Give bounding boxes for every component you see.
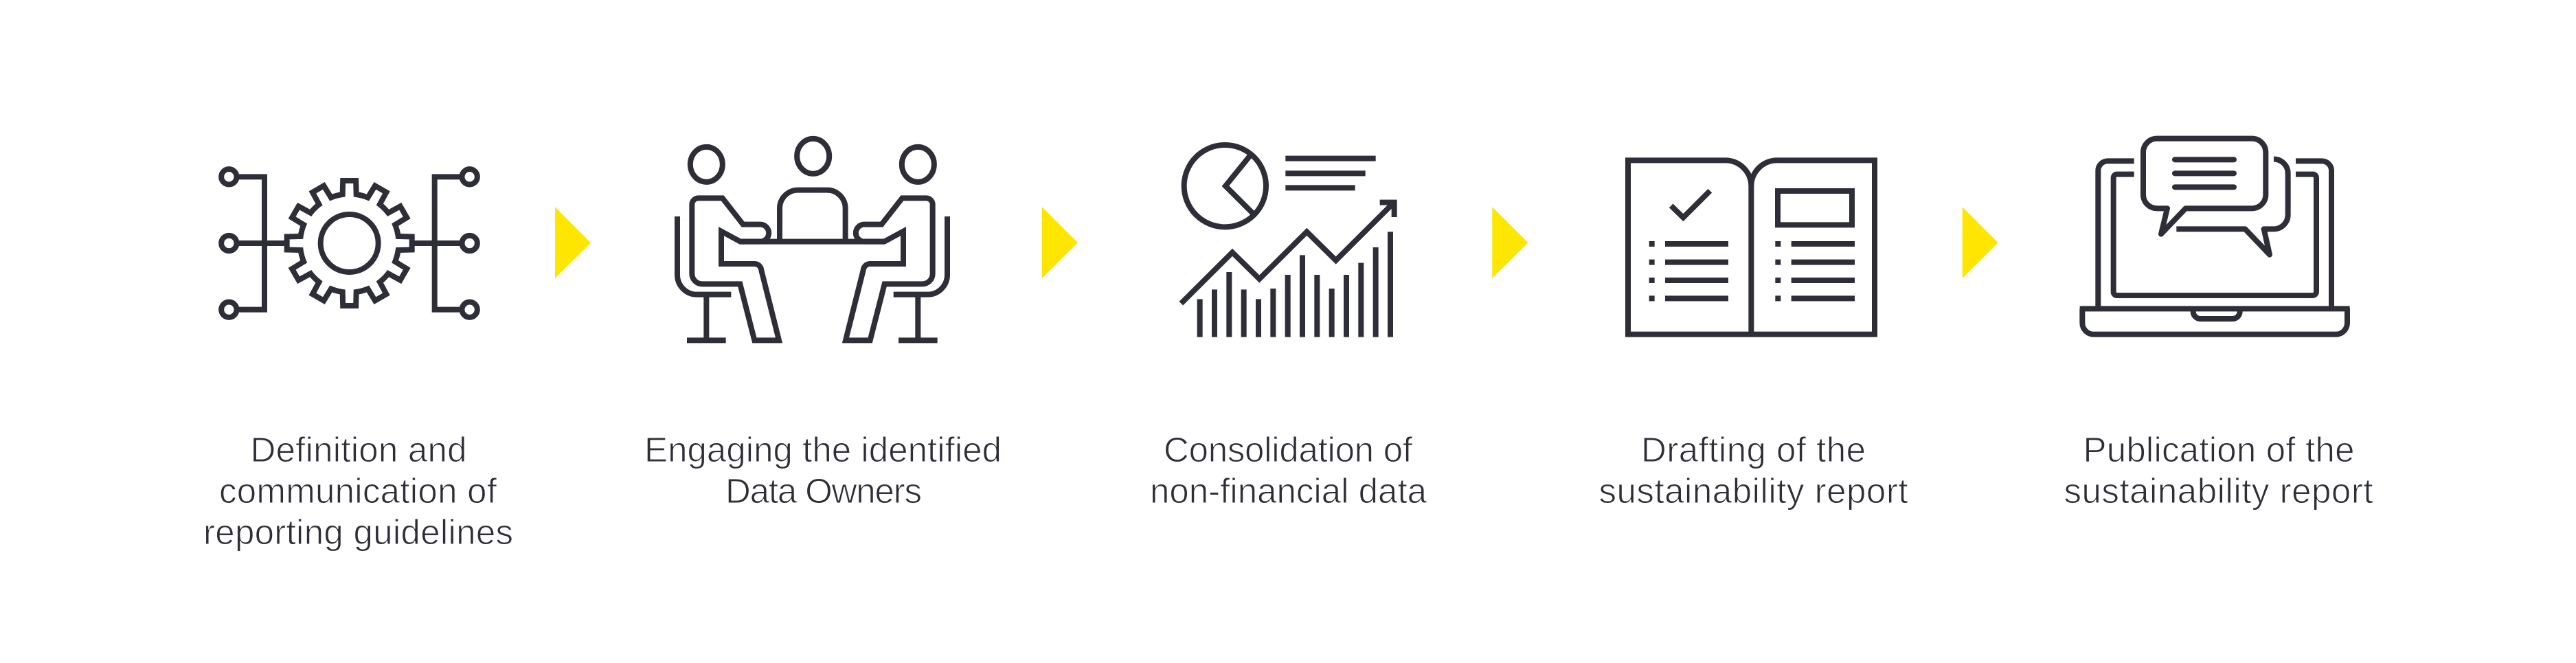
caption 4: Drafting of the bbox=[1641, 430, 1866, 469]
icon: gear with connected nodes bbox=[221, 169, 477, 317]
legend lines bbox=[1285, 159, 1376, 188]
book outline bbox=[1628, 160, 1875, 337]
arrow 2 bbox=[1042, 207, 1078, 278]
right page list bbox=[1775, 244, 1855, 298]
laptop lid bbox=[2098, 161, 2331, 308]
caption 2 bbox=[644, 430, 1002, 510]
table edge bbox=[741, 234, 884, 250]
caption 5 bbox=[2064, 430, 2373, 510]
caption 3 bbox=[1150, 430, 1427, 510]
icon: three people meeting at a table bbox=[677, 139, 947, 340]
caption 2: Engaging the identified bbox=[644, 430, 1002, 469]
right person bbox=[846, 147, 947, 340]
centre person bbox=[780, 139, 846, 242]
pie chart bbox=[1184, 145, 1266, 227]
icon: laptop with speech bubbles bbox=[2080, 139, 2350, 335]
check mark bbox=[1671, 191, 1710, 218]
front speech bubble bbox=[2143, 139, 2266, 234]
left person bbox=[677, 147, 779, 340]
trend arrow bbox=[1181, 203, 1394, 304]
caption 1: Definition and bbox=[250, 430, 467, 469]
gear bbox=[287, 181, 412, 306]
caption 1: reporting guidelines bbox=[203, 513, 513, 552]
laptop screen bbox=[2114, 175, 2316, 295]
back speech bubble bbox=[2176, 159, 2288, 255]
caption 5: sustainability report bbox=[2064, 471, 2373, 510]
bar chart bbox=[1200, 232, 1390, 337]
arrow 4 bbox=[1963, 207, 1998, 278]
arrow 1 bbox=[555, 207, 591, 278]
caption 4: sustainability report bbox=[1599, 471, 1908, 510]
left page list bbox=[1649, 244, 1728, 298]
caption 1 bbox=[203, 430, 513, 552]
laptop base bbox=[2080, 308, 2350, 335]
caption 5: Publication of the bbox=[2083, 430, 2355, 469]
arrow 3 bbox=[1492, 207, 1528, 278]
left connector nodes bbox=[221, 169, 284, 317]
right connector nodes bbox=[414, 169, 477, 317]
caption 3: non-financial data bbox=[1150, 471, 1427, 510]
caption 3: Consolidation of bbox=[1164, 430, 1413, 469]
right page picture box bbox=[1778, 191, 1852, 225]
bubble text lines bbox=[2175, 159, 2234, 187]
icon: pie chart, text lines and rising bar chart bbox=[1181, 145, 1394, 337]
caption 2: Data Owners bbox=[725, 471, 922, 510]
caption 4 bbox=[1599, 430, 1908, 510]
caption 1: communication of bbox=[219, 471, 497, 510]
icon: open report book bbox=[1628, 160, 1875, 337]
